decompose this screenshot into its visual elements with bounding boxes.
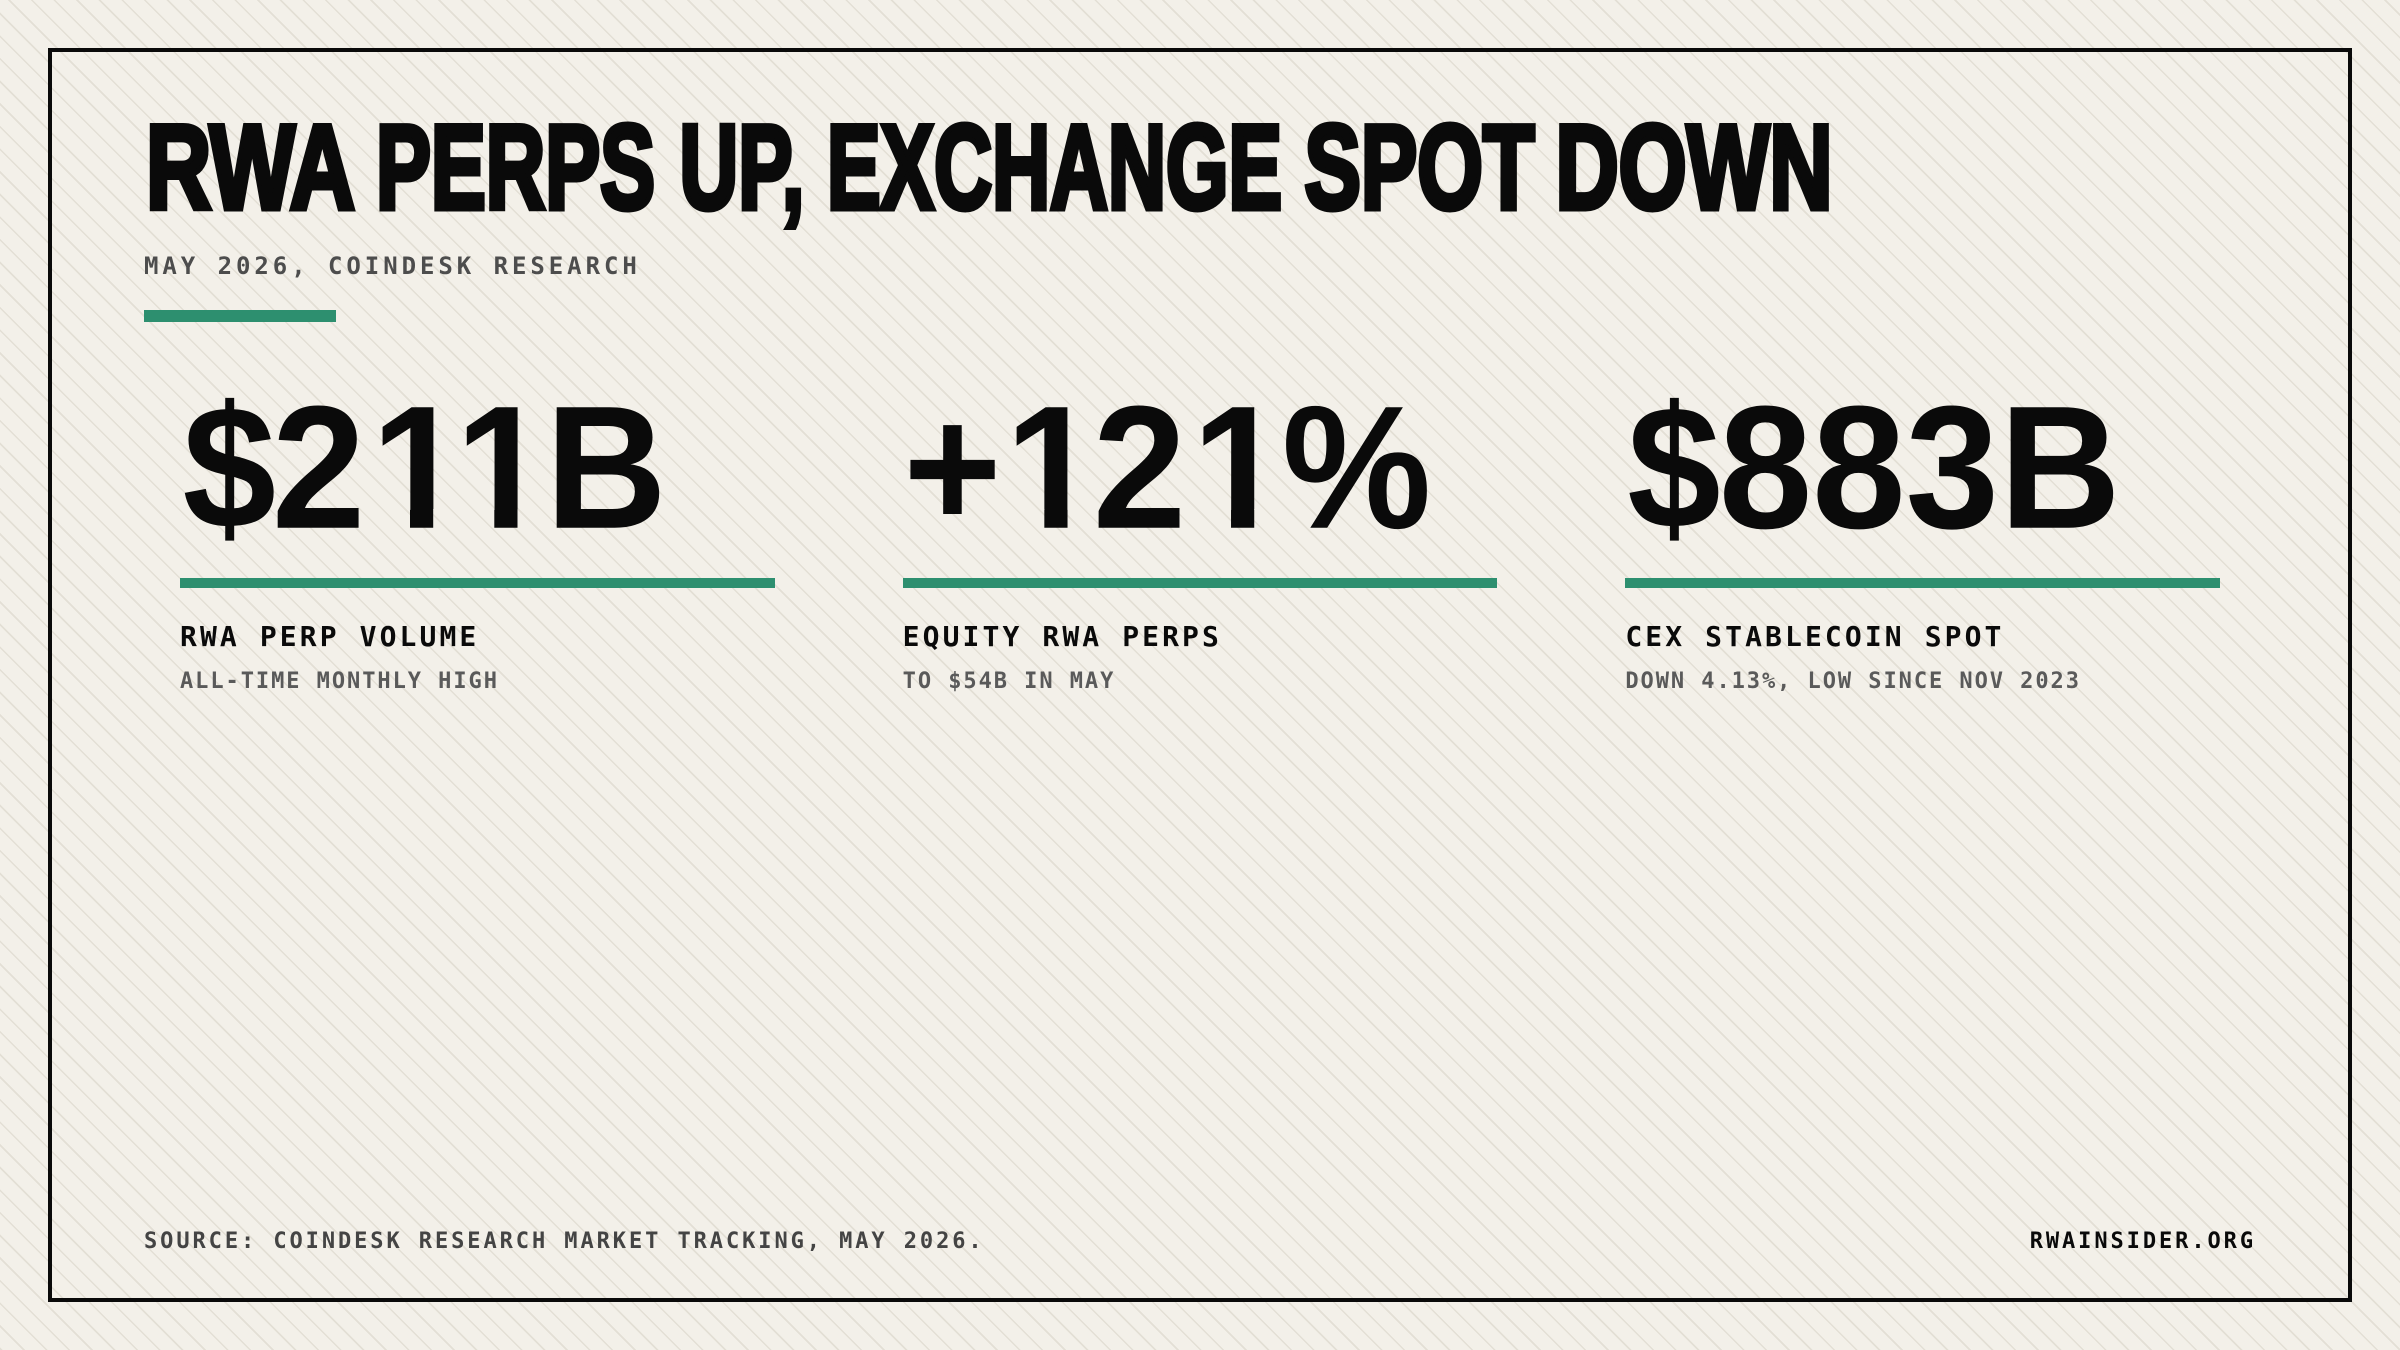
value: $211B (183, 371, 667, 565)
subtitle: MAY 2026, COINDESK RESEARCH (144, 252, 641, 280)
rule (1625, 578, 2220, 588)
title: EXCHANGE (827, 101, 1282, 235)
metric: RWA perp volume (180, 398, 775, 694)
label: CEX STABLECOIN SPOT (1625, 620, 2005, 653)
note: TO $54B IN MAY (903, 669, 1115, 694)
title: SPOT (1304, 101, 1534, 235)
rule (180, 578, 775, 588)
title: PERPS (376, 101, 655, 235)
value: $883B (1628, 371, 2121, 565)
title: RWA (146, 101, 355, 235)
metric: CEX stablecoin spot (1625, 371, 2220, 694)
site credit: RWAINSIDER.ORG (2030, 1229, 2256, 1254)
note: ALL-TIME MONTHLY HIGH (180, 669, 499, 694)
accent bar (144, 310, 336, 322)
source note: SOURCE: COINDESK RESEARCH MARKET TRACKING, MAY 2026. (144, 1229, 985, 1254)
title (146, 101, 1832, 235)
value: +121% (903, 371, 1431, 565)
metric: equity RWA perps (903, 406, 1497, 694)
note: DOWN 4.13%, LOW SINCE NOV 2023 (1625, 669, 2081, 694)
label: EQUITY RWA PERPS (903, 620, 1222, 653)
label: RWA PERP VOLUME (180, 620, 479, 653)
rule (903, 578, 1497, 588)
title: UP, (680, 101, 804, 235)
